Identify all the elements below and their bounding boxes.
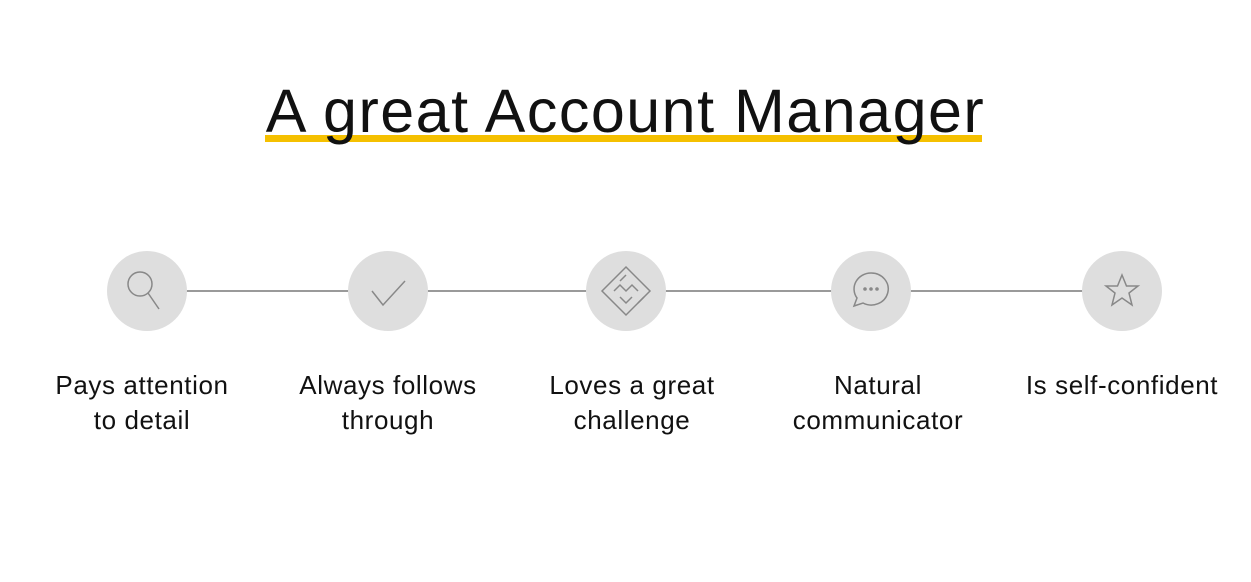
title: A great Account Manager: [266, 77, 985, 145]
label 2: [299, 370, 477, 435]
icon: chat bubble: [831, 251, 911, 331]
label 3: Loves a great: [549, 370, 715, 400]
icon: magnifier: [107, 251, 187, 331]
label 4: communicator: [793, 405, 963, 435]
label 3: challenge: [574, 405, 690, 435]
icon: maze: [586, 251, 666, 331]
label 1: to detail: [94, 405, 190, 435]
label 2: through: [342, 405, 434, 435]
label 2: Always follows: [299, 370, 477, 400]
title underline: [265, 135, 982, 142]
label 4: Natural: [834, 370, 922, 400]
icon: star: [1082, 251, 1162, 331]
label 1: [55, 370, 229, 435]
label 4: [793, 370, 963, 435]
label 5: Is self-confident: [1026, 370, 1218, 400]
label 3: [549, 370, 715, 435]
label 1: Pays attention: [55, 370, 229, 400]
icon: check: [348, 251, 428, 331]
